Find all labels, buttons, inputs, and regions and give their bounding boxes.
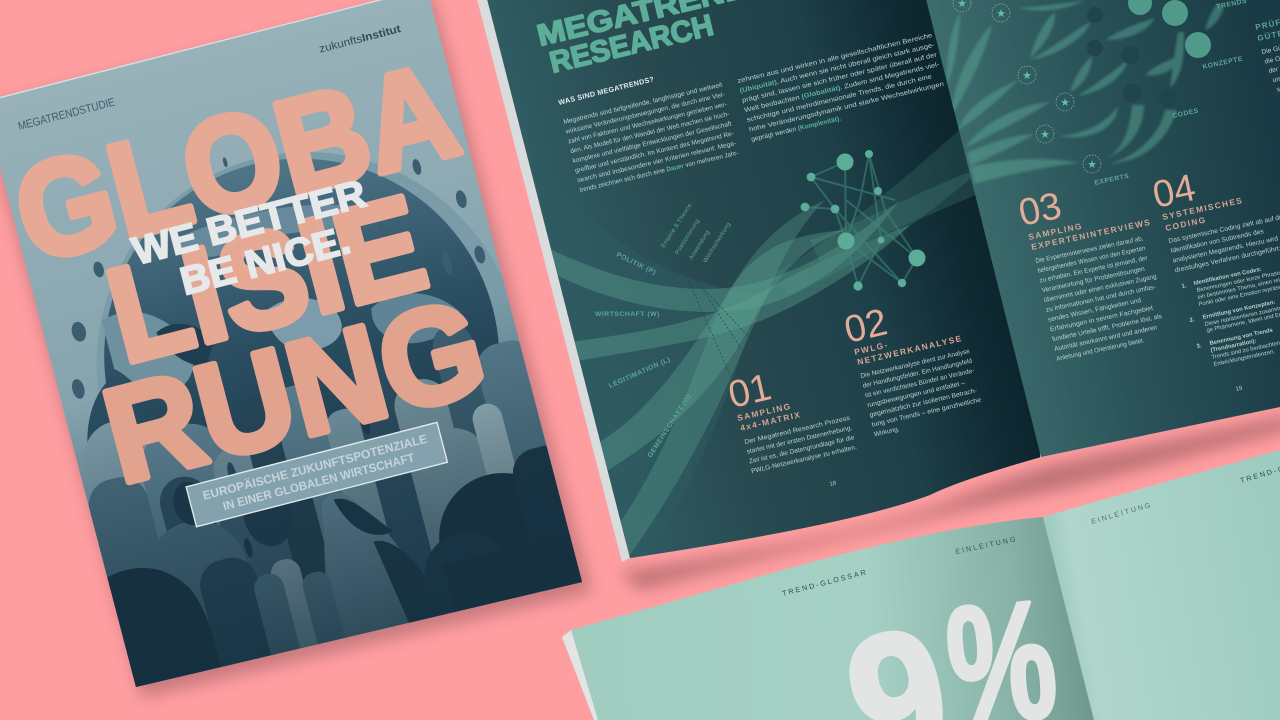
chart: coding tree: ★ bbox=[1022, 70, 1032, 82]
step 03: EXPERTENINTERVIEWS bbox=[1030, 217, 1152, 252]
step 05 heading bbox=[1255, 19, 1280, 92]
step 03: tiefergehendes Wissen von den Experten bbox=[1037, 245, 1146, 275]
text: intro column 1: zahl von Faktoren und Wechselwirkungen getrieben wer- bbox=[567, 101, 728, 145]
chart: coding tree: ★ bbox=[1087, 159, 1097, 171]
running heads: EINLEITUNG bbox=[955, 534, 1018, 556]
panel: mint booklet bbox=[562, 450, 1280, 720]
page number 19: 19 bbox=[1235, 386, 1244, 393]
step 02: rungsbewegungen und entfaltet – bbox=[867, 380, 966, 409]
text: intro column 1: wirksame Veränderungsbewegungen, die durch eine Viel- bbox=[564, 91, 725, 136]
text: intro column 1: trends zeichnen sich durch eine Dauer von mehreren Jahr- bbox=[579, 150, 739, 194]
tree labels: CODES bbox=[1172, 108, 1200, 120]
subtitle box: EUROPÄISCHE ZUKUNFTSPOTENZIALE bbox=[201, 431, 429, 503]
headline: we better be nice: BE NICE. bbox=[176, 219, 355, 304]
step 02: gegensätzlich zur isolierten Betrach- bbox=[869, 387, 978, 419]
chart: coding tree: ★ bbox=[996, 8, 1006, 20]
chart: coding tree: ★ bbox=[1060, 97, 1070, 109]
chart: flow ribbons bbox=[551, 130, 975, 558]
step 04: 04 bbox=[1149, 167, 1199, 217]
title: Globalisierung bbox=[18, 66, 484, 486]
title: Globalisierung: GLOBA bbox=[1, 35, 472, 291]
step 03: Autorität anerkannt wird und anderen bbox=[1054, 324, 1158, 353]
chart: network bbox=[801, 150, 926, 291]
big number bbox=[849, 600, 1056, 720]
text: intro column 2 bbox=[737, 32, 948, 143]
step 03: zu Informationen hat und durch umfas- bbox=[1045, 284, 1156, 314]
headline: we better be nice: WE BETTER bbox=[128, 172, 370, 274]
step 03: 03 bbox=[1015, 185, 1065, 235]
illustration: globe bbox=[87, 152, 520, 494]
step 04: Identifikation von Subtrends des bbox=[1170, 228, 1265, 255]
step 01: startet mit der ersten Datenerhebung. bbox=[746, 425, 853, 456]
right page bbox=[920, 0, 1280, 470]
subtitle box: IN EINER GLOBALEN WIRTSCHAFT bbox=[221, 450, 417, 513]
step 01: 4x4-MATRIX bbox=[739, 409, 802, 433]
chart: coding tree bbox=[947, 0, 1224, 184]
step 02 bbox=[846, 310, 981, 436]
step 02: Wirkung. bbox=[873, 426, 900, 438]
left page bbox=[571, 517, 1094, 720]
step 03: übernimmt oder einen exklusiven Zugang bbox=[1043, 273, 1158, 304]
tree labels: KONZEPTE bbox=[1202, 56, 1244, 71]
chart labels: Anwendung bbox=[689, 229, 711, 261]
list: coding steps: 2. bbox=[1189, 317, 1196, 324]
chart labels: POLITIK (P) bbox=[615, 252, 657, 277]
list: coding steps: (Trendnarration): bbox=[1210, 338, 1257, 354]
text: intro column 2: zehnten aus und wirken in alle gesellschaftlichen Bereiche bbox=[737, 32, 933, 85]
label: megatrendstudie: MEGATRENDSTUDIE bbox=[17, 96, 117, 133]
subtitle box bbox=[186, 422, 447, 527]
chart labels: GEMEINSCHAFT (G) bbox=[647, 393, 693, 459]
chart labels bbox=[595, 202, 732, 459]
text: intro column 2: hohe Veränderungsdynamik und starke Wechselwirkungen bbox=[748, 81, 945, 134]
list: coding steps bbox=[1181, 267, 1280, 368]
step 04: SYSTEMISCHES bbox=[1161, 195, 1244, 222]
text: intro column 2: (Ubiquität) . Auch wenn sie nicht überall gleich stark ausge- bbox=[739, 42, 935, 95]
step 03: Erfahrungen in seinem Fachgebiet bbox=[1050, 305, 1154, 333]
step 01: Ziel ist es, die Datengrundlage für die bbox=[748, 434, 855, 465]
text: intro column 1: search sind insbesondere vier Kriterien relevant: Mega- bbox=[577, 140, 737, 184]
panel: open spread bbox=[470, 0, 1280, 590]
tree labels: EXPERTS bbox=[1094, 173, 1130, 187]
right page bbox=[1043, 450, 1280, 720]
text: intro column 2: prägt sind, lassen sie sich früher oder später überall auf der bbox=[741, 51, 939, 104]
step 01: 01 bbox=[725, 366, 775, 417]
text: intro column 1: greifbar und verständlich. Im Kontext des Megatrend Re- bbox=[574, 130, 735, 175]
chart labels: Wechselwirkung bbox=[703, 222, 732, 264]
chart labels: Empirie & Theorie bbox=[661, 202, 694, 249]
step 02: PWLG- bbox=[853, 339, 889, 357]
step 01: SAMPLING bbox=[736, 401, 792, 423]
chart labels: WIRTSCHAFT (W) bbox=[595, 311, 660, 318]
chart labels: LEGITIMATION (L) bbox=[608, 356, 672, 390]
title: Globalisierung: LISIE bbox=[94, 168, 439, 392]
step 02: der Handlungsfelder. Ein Handlungsfeld bbox=[862, 358, 973, 390]
heading: Megatrend Research: RESEARCH bbox=[547, 9, 717, 80]
logo: zukunftsInstitut: zukunftsInstitut bbox=[318, 23, 402, 56]
step 02: Die Netzwerkanalyse dient zur Analyse bbox=[860, 348, 971, 380]
list: coding steps: Entwicklungstendenzen. bbox=[1213, 349, 1276, 368]
running heads: TREND-GLOSSAR bbox=[781, 567, 869, 598]
text: intro column 2: geprägt werden (Komplexität). bbox=[751, 115, 842, 143]
step 03: zu erhalten. Ein Experte ist jemand, der bbox=[1039, 255, 1149, 285]
text: intro column 1 bbox=[562, 82, 739, 194]
list: coding steps: 1. bbox=[1181, 283, 1188, 290]
running heads bbox=[782, 466, 1280, 596]
text: intro column 1: Megatrends sind tiefgreifende, langfristige und weltweit bbox=[563, 82, 723, 126]
step 04: CODING bbox=[1164, 214, 1207, 233]
panel: magazine cover bbox=[0, 0, 624, 720]
step 03: Anleitung und Orientierung bietet. bbox=[1056, 337, 1145, 363]
step 02: ist ein verdichtetes Bündel an Verände- bbox=[864, 367, 975, 399]
step 03: SAMPLING bbox=[1027, 221, 1084, 242]
list: coding steps: 3. bbox=[1196, 343, 1203, 350]
left page bbox=[470, 0, 1040, 580]
tree labels bbox=[1094, 0, 1248, 187]
step 01: PWLG-Netzwerkanalyse zu erhalten. bbox=[751, 444, 858, 475]
text: intro column 2: schichtige und mehrdimensionale Trends, die durch eine bbox=[746, 73, 933, 124]
subheading: Was sind Megatrends: WAS SIND MEGATRENDS? bbox=[557, 74, 655, 107]
title: Globalisierung: RUNG bbox=[90, 272, 499, 512]
step 01: Der Megatrend Research Prozess bbox=[744, 415, 851, 446]
running heads: EINLEITUNG bbox=[1090, 500, 1153, 526]
step 03 bbox=[1020, 193, 1162, 361]
step 01 bbox=[730, 374, 856, 474]
step 02: 02 bbox=[841, 301, 891, 352]
illustration: crowd bbox=[70, 323, 582, 687]
chart: coding tree: ★ bbox=[1040, 129, 1050, 141]
step 03: Verantwortung für Problemlösungen bbox=[1041, 266, 1146, 294]
list: coding steps: Identifikation von Codes: bbox=[1193, 267, 1262, 287]
step 03: Die Experteninterviews zielen darauf ab, bbox=[1035, 235, 1144, 265]
step 02: tung von Trends – eine ganzheitliche bbox=[871, 397, 982, 429]
page number 18: 18 bbox=[829, 480, 838, 488]
step 04 bbox=[1149, 167, 1280, 368]
list: coding steps: Benennung von Trends bbox=[1209, 328, 1273, 347]
step 03: fundierte Urteile trifft, Probleme löst, als bbox=[1052, 313, 1163, 343]
chart labels: Positionierung bbox=[675, 218, 701, 256]
step 02: NETZWERKANALYSE bbox=[856, 333, 963, 367]
text: intro column 2: Welt beobachten (Globalität) . Zudem sind Megatrends viel- bbox=[744, 61, 940, 114]
list: coding steps: Ermittlung von Konzepten: bbox=[1202, 300, 1276, 321]
illustration: balloons bbox=[72, 157, 486, 399]
text: intro column 1: komplexe und vielfältige Entwicklungen der Gesellschaft bbox=[572, 121, 732, 165]
step 03: sendes Wissen, Fähigkeiten und bbox=[1047, 297, 1142, 324]
step 04: dreistufiges Verfahren durchgeführt: bbox=[1174, 245, 1280, 274]
text: intro column 1: den. Als Modell für den Wandel der Welt machen sie hoch- bbox=[570, 111, 730, 155]
